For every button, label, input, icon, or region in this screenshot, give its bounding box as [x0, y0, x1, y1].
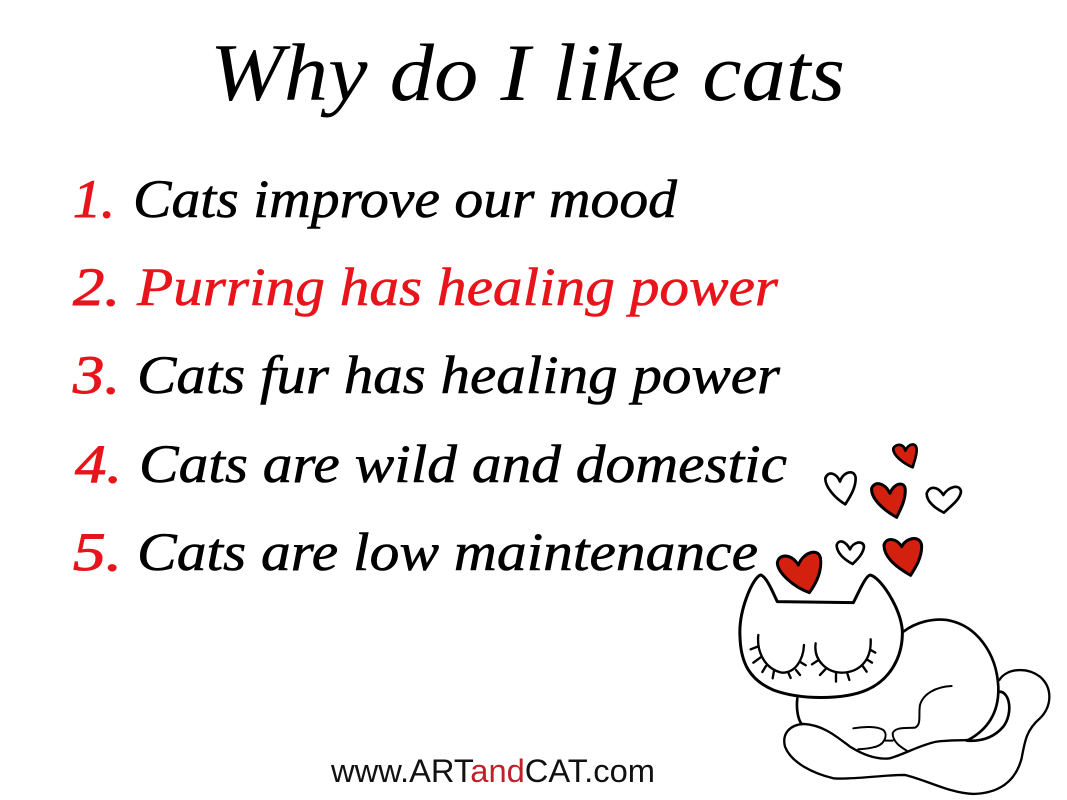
website footer: www.ARTandCAT.com — [330, 753, 655, 789]
list item 5: Cats are low maintenance — [137, 522, 758, 582]
list item 2: 2. — [73, 257, 120, 317]
heart: outline small — [837, 541, 864, 564]
list item 2: Purring has healing power — [136, 257, 779, 317]
list item 3: Cats fur has healing power — [137, 345, 781, 405]
list item 1: 1. — [73, 169, 115, 229]
heart: red centre — [872, 484, 905, 517]
list item 4: 4. — [75, 434, 122, 494]
title: Why do I like cats — [210, 27, 845, 118]
cat head — [740, 575, 902, 697]
heart: outline left — [825, 472, 856, 504]
list item 5: 5. — [73, 522, 122, 582]
cat body — [797, 620, 1009, 741]
heart: small red top — [893, 444, 917, 467]
illustration: sleeping cat with hearts — [740, 444, 1049, 794]
list item 1: Cats improve our mood — [133, 169, 678, 229]
cat tail and lower body — [784, 670, 1049, 794]
list item 3: 3. — [72, 345, 120, 405]
cat paws — [853, 686, 952, 751]
heart: large red left — [777, 552, 821, 593]
cat closed eyes — [751, 635, 875, 682]
heart: red right — [884, 539, 922, 575]
heart: outline right — [927, 487, 961, 513]
list item 4: Cats are wild and domestic — [139, 434, 787, 494]
